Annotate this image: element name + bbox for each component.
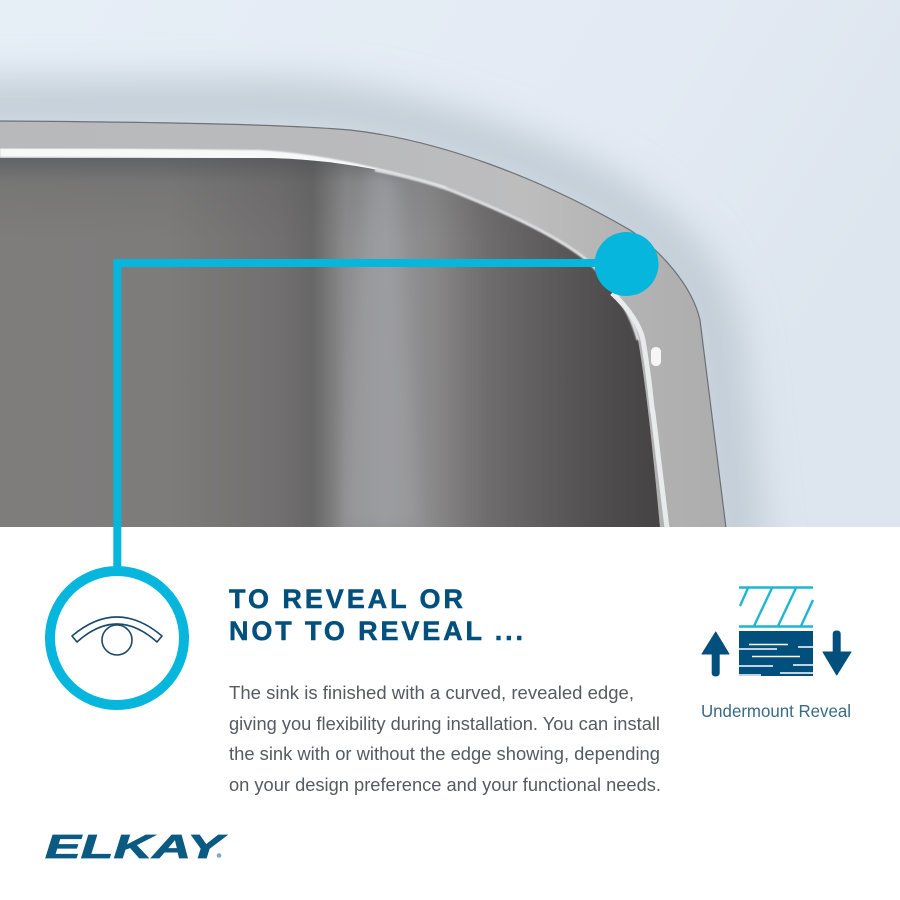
sink photograph [0, 0, 900, 560]
icon caption: Undermount Reveal [701, 701, 851, 721]
body text [229, 682, 661, 795]
heading: NOT TO REVEAL ... [229, 616, 523, 646]
clip bump on rim [651, 347, 661, 366]
body text: the sink with or without the edge showing, depending [229, 743, 660, 764]
down arrow [823, 631, 851, 675]
icon: eye in circle [50, 571, 184, 705]
callout connector line [117, 263, 598, 572]
icon: undermount reveal diagram [702, 588, 851, 676]
callout dot [594, 232, 658, 296]
body text: on your design preference and your functional needs. [229, 774, 661, 795]
body text: The sink is finished with a curved, revealed edge, [229, 682, 634, 703]
logo: Elkay [45, 828, 228, 865]
body text: giving you flexibility during installation. You can install [229, 713, 660, 734]
logo: Elkay: ELKAY [45, 828, 228, 865]
white lower panel [0, 527, 900, 900]
rim white highlight [0, 152, 445, 191]
counter shadow along rim [0, 105, 740, 560]
rim inner white strip [612, 293, 667, 528]
basin interior [0, 150, 680, 530]
up arrow [702, 632, 729, 676]
heading [229, 584, 523, 646]
heading: TO REVEAL OR [229, 584, 463, 614]
rim inner edge [375, 170, 638, 340]
metal rim [0, 121, 726, 528]
rim outer edge line [0, 121, 726, 528]
